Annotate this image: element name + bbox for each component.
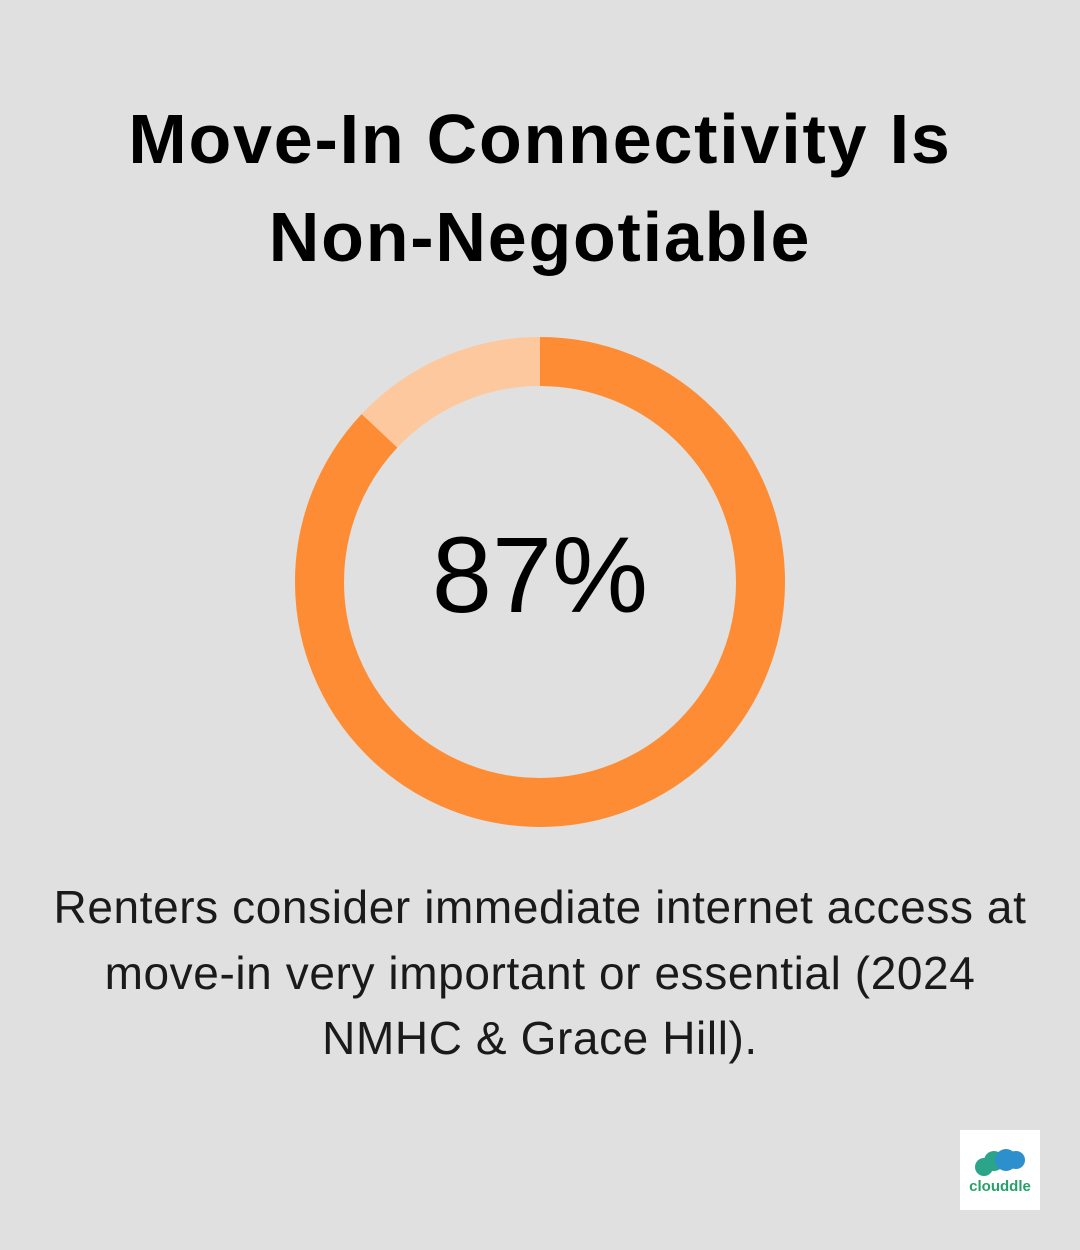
description text: Renters consider immediate internet access at [54,881,1026,933]
logo [960,1130,1040,1210]
description text: move-in very important or essential (2024 [105,946,975,998]
title [128,100,952,276]
donut chart: 87% [432,514,648,635]
title: Move-In Connectivity Is [128,100,952,178]
description text [54,881,1026,1064]
description text: NMHC & Grace Hill). [322,1012,758,1064]
title: Non-Negotiable [269,198,811,276]
logo: clouddle [969,1178,1031,1195]
